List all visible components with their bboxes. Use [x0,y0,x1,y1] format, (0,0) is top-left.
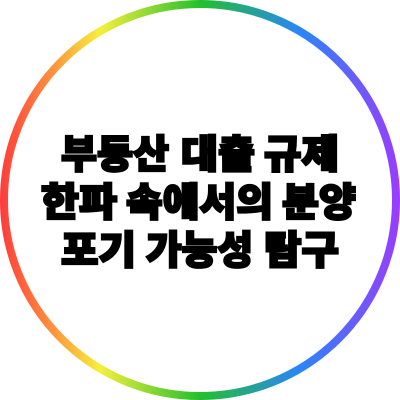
title [41,134,356,273]
title line 1 [61,134,339,177]
title line 3: 포기 [61,230,136,273]
title line 2: 한파 [41,182,117,225]
title line 1: 규제 [264,134,339,177]
title line 1: 부동산 [61,134,169,177]
title line 2 [41,182,356,225]
title line 2: 분양 [282,182,356,225]
title line 3 [61,230,339,273]
title line 1: 대출 [181,134,255,177]
title line 3: 탐구 [264,230,339,273]
title line 3: 가능성 [146,230,253,273]
title line 2: 속에서의 [126,182,273,225]
